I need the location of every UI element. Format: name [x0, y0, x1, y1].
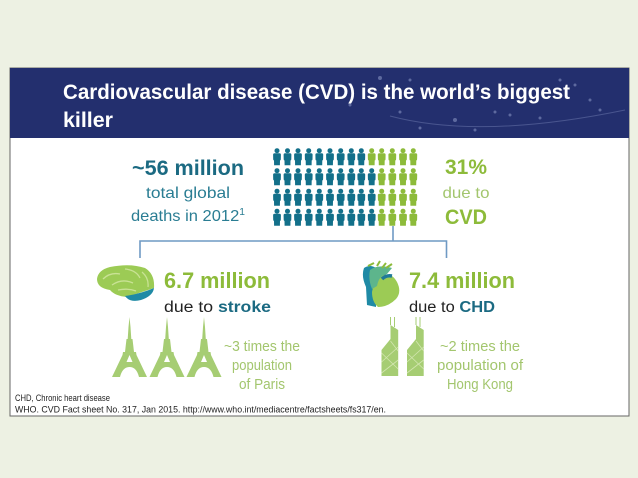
Hong Kong comparison text: population of — [437, 358, 524, 374]
CHD figures: due to CHD — [409, 299, 495, 316]
31% due to CVD text: due to — [442, 185, 490, 202]
Paris comparison text — [224, 339, 300, 393]
total deaths text — [131, 156, 245, 225]
31% due to CVD text: 31% — [445, 155, 487, 179]
total deaths text: deaths in 2012 — [131, 208, 236, 225]
Paris comparison text: population — [232, 358, 292, 374]
total deaths text: total global — [146, 185, 230, 202]
pictogram: people grid — [273, 148, 417, 226]
connector bracket — [140, 226, 446, 258]
Paris comparison text: of Paris — [239, 377, 285, 393]
slide panel — [10, 68, 629, 416]
Hong Kong comparison text — [437, 339, 524, 393]
icon: brain — [97, 265, 154, 301]
header banner — [10, 68, 629, 138]
Hong Kong comparison text: ~2 times the — [440, 339, 520, 355]
footnotes: CHD, Chronic heart disease — [15, 393, 110, 403]
icon: Hong Kong towers — [382, 317, 424, 376]
CHD figures — [409, 268, 515, 316]
icon: Eiffel towers — [112, 317, 222, 377]
stroke figures: due to stroke — [164, 299, 271, 316]
stroke figures: 6.7 million — [164, 268, 270, 293]
icon: heart — [363, 261, 399, 307]
CHD figures: 7.4 million — [409, 268, 515, 293]
Paris comparison text: ~3 times the — [224, 339, 300, 355]
total deaths text: 1 — [239, 207, 245, 218]
total deaths text: ~56 million — [132, 156, 244, 180]
31% due to CVD text — [442, 155, 490, 229]
title: killer — [63, 109, 113, 132]
31% due to CVD text: CVD — [445, 205, 487, 229]
title: Cardiovascular disease (CVD) is the world’s biggest — [63, 81, 570, 104]
footnotes: WHO. CVD Fact sheet No. 317, Jan 2015. http://www.who.int/mediacentre/factsheets/fs317/en. — [15, 404, 386, 414]
stroke figures — [164, 268, 271, 316]
Hong Kong comparison text: Hong Kong — [447, 377, 513, 393]
footnotes — [15, 393, 386, 414]
